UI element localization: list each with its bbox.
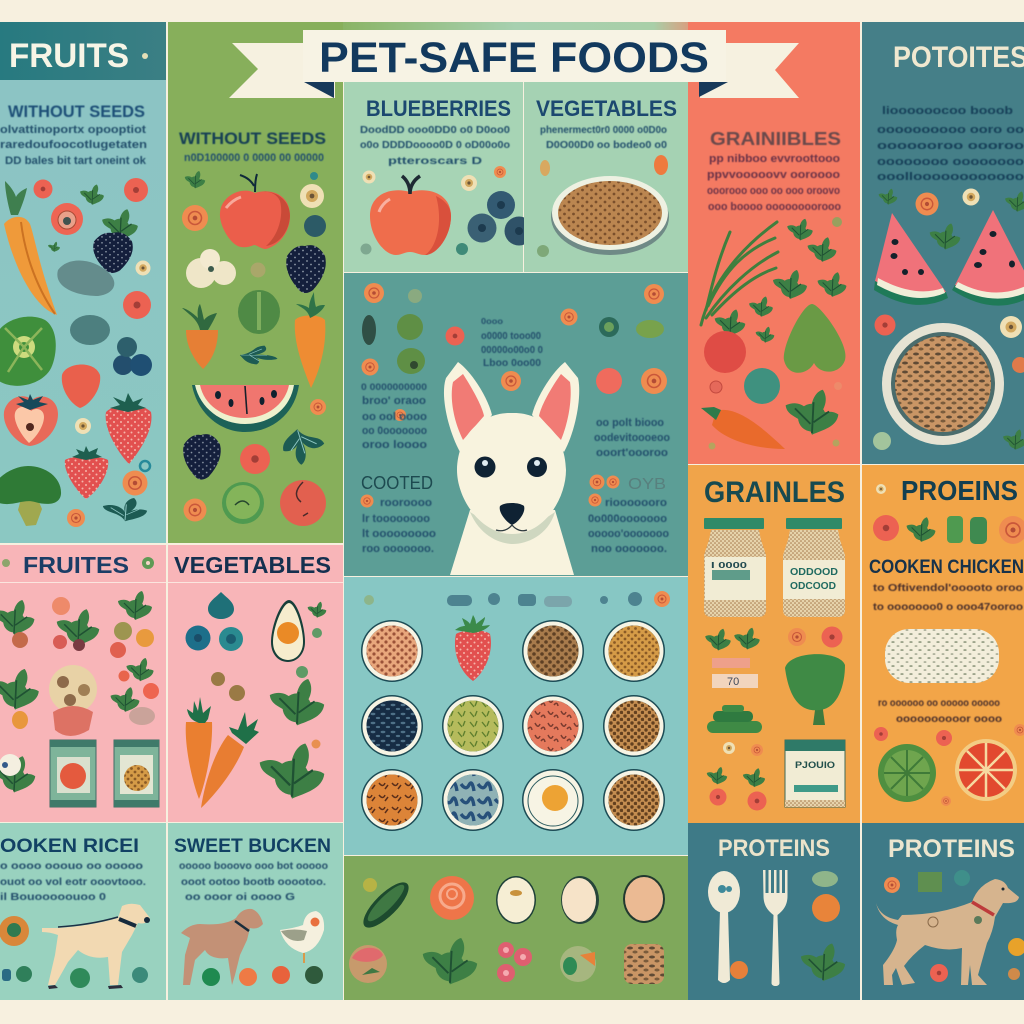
heading: fruits: FRUITS: [9, 37, 129, 75]
icon: food packet left: [50, 740, 96, 807]
upper center text: [481, 317, 543, 369]
fruits description text: olvattinoportx opooptiot: [0, 124, 146, 136]
icon: packet: PJOUIO: [795, 760, 835, 770]
icon: blackberry: [93, 209, 138, 273]
icon: leaf and nut clusters: [0, 591, 159, 729]
icon: small flowers: [873, 188, 1024, 450]
right text block: oo polt biooo: [596, 417, 664, 429]
upper center text: o0000 tooo00: [481, 331, 541, 342]
heading: blueberries: BLUEBERRIES: [366, 96, 511, 121]
fruits description text: [0, 124, 147, 167]
vegetables text: [540, 125, 667, 151]
divider: [168, 582, 343, 583]
icon: bowl of kibble: [551, 176, 669, 255]
bowl: green vegetables: [442, 695, 504, 757]
slate description text: oooooooooo ooro oo: [877, 124, 1024, 136]
cooked rice text: ouot oo vol eotr ooovtooo.: [0, 877, 146, 888]
left text block: oo ool oooo: [362, 411, 427, 423]
top band behind banner: [343, 22, 688, 82]
panel: fruites pink: [0, 545, 166, 822]
panel: vegetables coral: [688, 22, 860, 464]
cooked text left: lt ooooooooo: [362, 528, 436, 540]
illustration: white chicken: [280, 911, 324, 963]
blueberries text: ptteroscars D: [388, 156, 482, 167]
icon: strawberry lower: [65, 446, 108, 499]
icon: leaf clusters: [715, 219, 846, 343]
illustration: white dog: [444, 362, 579, 575]
divider: [0, 582, 166, 583]
icon: avocado with yolk: [271, 600, 305, 662]
icon: watermelon right: [952, 210, 1024, 306]
icon: green citrus slice: [878, 744, 936, 802]
icon: packet: [785, 740, 845, 807]
heading: proteins: PROTEINS: [718, 835, 830, 862]
heading: cooked: COOTED: [361, 473, 433, 493]
icon: small leaf dots header: [2, 557, 154, 569]
upper center text: Lboo 0oo00: [483, 358, 541, 369]
icon: green dots: [2, 966, 148, 988]
dog eyes: [474, 456, 496, 478]
icon: red apple: [220, 174, 290, 249]
banner left ribbon: [229, 43, 335, 98]
icon: strawberry right: [106, 393, 151, 464]
icon: carrot: [701, 407, 785, 449]
dog nose and mouth: [500, 503, 524, 525]
cooked rice text: [0, 861, 146, 903]
icon: jar left: I 0000: [711, 561, 748, 570]
right text block: [594, 417, 670, 459]
left text block: [361, 382, 427, 451]
icon: cucumber: [357, 876, 415, 934]
heading: sweet chicken: SWEET BUCKEN: [174, 836, 331, 857]
left text block: oo 0ooooooo: [362, 425, 427, 437]
icon: green apple: [222, 482, 264, 524]
panel: vegetables pink: [168, 545, 343, 822]
icon: green heart leaf: [784, 304, 846, 373]
cooked text right: riooooooro: [605, 497, 667, 509]
left text block: oroo loooo: [362, 439, 427, 451]
icon: white mushrooms: [186, 249, 236, 288]
panel: grainless orange: [688, 465, 860, 823]
row of small icons: [364, 591, 670, 607]
icon: red peach: [280, 480, 326, 526]
proteins lower text: oooooooooor oooo: [896, 714, 1002, 725]
icon: labels: 70: [727, 676, 739, 688]
icon: leaf with fruit: [0, 754, 35, 792]
icon: pink radishes: [497, 942, 532, 982]
icon: small fruits and leaves: [34, 178, 151, 527]
panel: proteins orange: [862, 465, 1024, 823]
panel: vegetables: [524, 82, 688, 272]
icon: colored dots: [202, 966, 323, 986]
icon: egg cream: [561, 876, 599, 924]
icon: egg brown: [623, 875, 665, 923]
bowl: orange stew: [361, 769, 423, 831]
icon: red fruit: [240, 444, 270, 474]
coral description text: ooo boooo oooooooorooo: [708, 201, 841, 213]
cooked text left: [362, 497, 436, 555]
small fruit and vegetable icons: [362, 283, 667, 421]
right text block: ooort'oooroo: [596, 447, 668, 459]
heading: vegetables: VEGETABLES: [536, 96, 677, 121]
icon: leafy greens upper: [270, 679, 324, 725]
icon: red apple: [370, 176, 451, 255]
icon: short carrot: [182, 304, 218, 369]
icon: watermelon left: [874, 213, 948, 305]
cooked text right: [588, 497, 669, 555]
fruits description text: DD bales bit tart oneint ok: [5, 155, 147, 167]
icon: heart apple: [4, 394, 58, 446]
icon: green pile: [707, 705, 762, 733]
slate description text: ooolloooooooooooo: [877, 171, 1024, 183]
vegetables text: phenermect0r0 0000 o0D0o: [540, 125, 667, 136]
panel: blueberries: [344, 82, 534, 272]
left text block: 0 0000000000: [361, 382, 427, 392]
icon: green cabbage: [0, 317, 56, 386]
heading: grainles: GRAINLES: [704, 476, 845, 509]
bowl: brown kibble: [522, 620, 584, 682]
dog head: [457, 413, 566, 534]
panel: without seeds green: [168, 22, 343, 543]
cooked text left: roo ooooooo.: [362, 543, 434, 555]
small orange dots: [360, 474, 620, 508]
icon: ring fruit: [0, 916, 29, 946]
heading: vegetables: VEGETABLES: [174, 552, 331, 578]
icon: carrot upright: [186, 697, 212, 799]
coral description text: ooorooo ooo oo ooo oroovo: [707, 185, 840, 197]
slate description text: oooooooo oooooooo: [877, 156, 1024, 168]
icon: row of food: [873, 484, 1024, 544]
icon: broccoli: [0, 466, 61, 526]
banner right ribbon: [700, 43, 799, 98]
icon: teal ball: [744, 368, 780, 404]
heading: proteins: PROTEINS: [888, 835, 1015, 863]
panel: proteins utensils: [688, 823, 860, 1000]
banner main plate: [303, 30, 726, 82]
upper center text: 00000o00o0 0: [481, 345, 543, 356]
header bullet: [142, 53, 148, 59]
icon: walnut mix: [49, 665, 97, 736]
icon: blueberries: [186, 592, 243, 651]
title: PET-SAFE FOODS: [319, 34, 709, 82]
cooked text right: 0o000ooooooo: [588, 513, 667, 525]
panel: potatoes slate: [862, 22, 1024, 464]
panel: central dog: [344, 273, 688, 576]
icon: fork: [763, 870, 788, 986]
icon: tomato: [704, 331, 746, 373]
icon: small foods: [884, 870, 1024, 982]
panel: cooked rice: [0, 823, 166, 1000]
bowl: golden kibble: [603, 620, 665, 682]
bowl: dark berries: [361, 695, 423, 757]
icon: jar right: [783, 518, 845, 617]
icon: small fruit: [182, 171, 326, 522]
bowl: dark kibble: [603, 769, 665, 831]
icon: fern leaf: [278, 422, 328, 469]
left text block: broo' oraoo: [362, 395, 426, 407]
dog body: [450, 510, 574, 575]
heading: cooked rice: OOKEN RICEI: [0, 836, 139, 857]
bowl: egg: [522, 769, 584, 831]
blueberries text: [360, 125, 510, 167]
dog right ear: [532, 362, 579, 452]
proteins lower text: [878, 698, 1002, 725]
bowl: tan kibble: [603, 695, 665, 757]
icon: mixed bowl: [349, 945, 387, 983]
banner: [229, 30, 799, 98]
coral description text: ppvvooooovv ooroooo: [707, 169, 840, 181]
cooked text left: rooroooo: [380, 497, 432, 509]
icon: blackberry: [286, 245, 326, 293]
icon: grapefruit slice: [955, 739, 1017, 801]
cooked rice text: il Bouooooouoo 0: [0, 892, 107, 903]
icon: jar right: ODCOOD: [790, 581, 836, 592]
heading: fruites: FRUITES: [23, 552, 129, 578]
panel: fruits left column: [0, 22, 166, 543]
slate description text: [877, 105, 1024, 183]
icon: grain square: [624, 944, 664, 984]
bowl: salmon pieces: [522, 695, 584, 757]
icon: rosemary sprig: [701, 222, 778, 325]
icon: small leaves right: [211, 602, 326, 748]
icon: jar right: ODDOOD: [790, 567, 838, 578]
blueberries text: DoodDD ooo0DD0 o0 D0oo0: [360, 125, 510, 136]
icon: leaves and dots: [705, 626, 842, 650]
icon: carrot diagonal: [201, 712, 259, 808]
icon: green pepper: [238, 290, 280, 334]
icon: lower blackberry: [183, 434, 221, 480]
icon: salmon rose: [430, 876, 474, 920]
panel: green food row: [344, 856, 688, 1000]
sweet chicken text: oo ooor oi oooo G: [185, 892, 295, 903]
dog collar shadow: [470, 512, 555, 544]
illustration: tan dog: [876, 879, 1019, 985]
vegetables text: D0O00D0 oo bodeo0 o0: [546, 140, 667, 151]
icon: egg white: [496, 876, 536, 924]
cooked text left: lr toooooooo: [362, 513, 430, 525]
sweet chicken text: [179, 861, 328, 903]
proteins description text: to ooooooo0 o ooo47ooroo: [873, 602, 1023, 613]
icon: carrot: [4, 181, 57, 315]
icon: leafy green: [786, 390, 838, 435]
cooked text right: noo ooooooo.: [591, 543, 667, 555]
icon: strawberry: [455, 615, 491, 681]
sweet chicken text: ooooo booovo ooo bot ooooo: [179, 861, 328, 872]
cooked text right: ooooo'ooooooo: [588, 528, 669, 540]
icon: jar left: [704, 518, 766, 617]
icon: watermelon slice: [192, 385, 299, 432]
coral description text: pp nibboo evvroottooo: [709, 153, 840, 165]
slate description text: ooooooroo oooroo: [877, 140, 1024, 152]
fruits description text: raredoufoocotlugetaten: [0, 139, 147, 151]
description text: n0D100000 0 0000 00 00000: [184, 152, 324, 164]
upper center text: 0ooo: [481, 317, 503, 326]
icon: small vegetables: [707, 742, 766, 810]
fruits header bar: [0, 22, 166, 80]
icon: long carrot: [295, 292, 325, 388]
heading: proteins: PROEINS: [901, 475, 1018, 506]
icon: small foods: [730, 871, 845, 981]
illustration: brown dog: [181, 909, 263, 985]
proteins lower text: ro oooooo oo ooooo ooooo: [878, 698, 1000, 709]
icon: small fruit: [360, 166, 506, 255]
proteins description text: to Oftivendol'ooooto oroo: [873, 583, 1023, 594]
bowl: blue swirl: [442, 769, 504, 831]
icon: tomato: [62, 364, 100, 408]
icon: rice patty: [885, 629, 999, 683]
icon: bowl of kibble: [882, 323, 1004, 445]
icon: leafy greens lower: [260, 744, 324, 799]
cooked rice text: o oooo ooouo oo ooooo: [0, 861, 143, 872]
sweet chicken text: ooot ootoo bootb ooootoo.: [181, 877, 326, 888]
subheading: without seeds: WITHOUT SEEDS: [179, 129, 326, 148]
icon: green herb: [423, 938, 477, 984]
icon: blueberries: [468, 191, 534, 246]
right text block: oodevitoooeoo: [594, 432, 670, 444]
slate description text: lioooooocoo booob: [882, 105, 1013, 117]
icon: vegetable plate: [560, 946, 596, 982]
illustration: tan dog: [42, 904, 150, 989]
panel: sweet chicken: [168, 823, 343, 1000]
icon: spoon: [708, 871, 740, 983]
heading: vegetables faded: GRAINIIBLES: [710, 129, 841, 149]
icon: grey leaf: [57, 260, 114, 296]
icon: green tree: [785, 654, 845, 725]
coral description text: [707, 153, 841, 213]
proteins description text: [873, 583, 1023, 613]
small dots: [708, 217, 842, 450]
icon: labels: [712, 658, 758, 688]
panel: bowls grid: [344, 577, 688, 855]
bowl: salmon kibble: [361, 620, 423, 682]
panel: proteins dog: [862, 823, 1024, 1000]
icon: food packet right: [114, 740, 159, 807]
icon: leaf scribble: [240, 346, 278, 364]
icon: blue-grey plants: [70, 315, 152, 376]
blueberries text: o0o DDDDoooo0D 0 oD00o0o: [360, 140, 510, 151]
subheading: without seeds: WITHOUT SEEDS: [8, 102, 145, 121]
icon: small fruits: [874, 724, 1024, 806]
dog left ear: [444, 362, 492, 452]
icon: small fruit: [537, 155, 668, 257]
heading: cooked right: OYB: [628, 476, 666, 493]
